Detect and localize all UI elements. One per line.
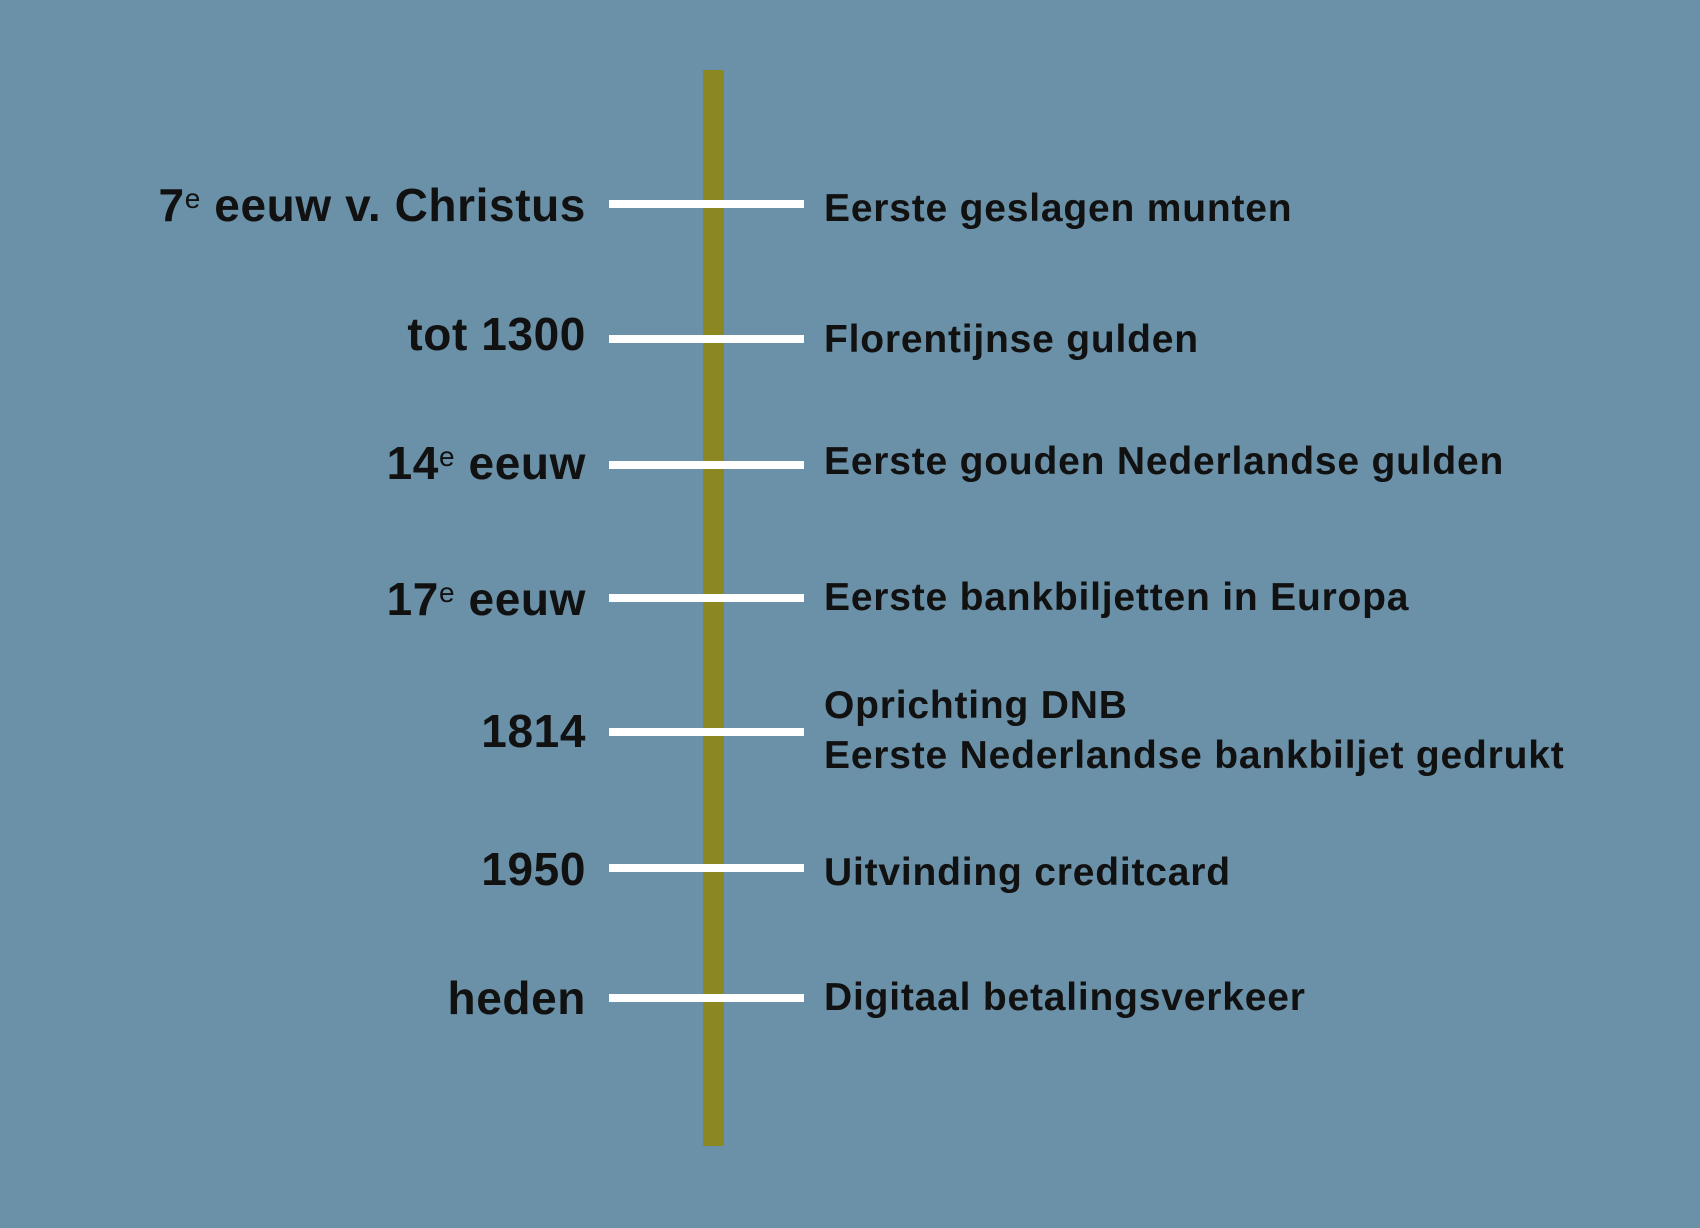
label: heden: heden: [448, 972, 586, 1024]
label: 7e eeuw v. Christus: 7e eeuw v. Christus: [158, 179, 586, 231]
event: Eerste bankbiljetten in Europa: Eerste bankbiljetten in Europa: [824, 576, 1409, 619]
tick: 1814: [609, 728, 804, 736]
event: Oprichting DNB: [824, 684, 1564, 777]
label: 14e eeuw: 14e eeuw: [387, 437, 586, 489]
label: 1950: 1950: [481, 843, 586, 895]
event: Eerste geslagen munten: Eerste geslagen munten: [824, 187, 1292, 230]
event: Eerste gouden Nederlandse gulden: Eerste gouden Nederlandse gulden: [824, 440, 1504, 483]
tick: 17e eeuw: [609, 594, 804, 602]
event: Florentijnse gulden: Florentijnse gulden: [824, 318, 1199, 361]
tick: tot 1300: [609, 335, 804, 343]
event: Digitaal betalingsverkeer: Digitaal betalingsverkeer: [824, 976, 1306, 1019]
event: Uitvinding creditcard: Uitvinding creditcard: [824, 851, 1231, 894]
timeline bar: [703, 70, 724, 1146]
event: Oprichting DNB: Oprichting DNB: [824, 684, 1128, 727]
tick: 1950: [609, 864, 804, 872]
label: tot 1300: tot 1300: [407, 308, 586, 360]
tick: 7e eeuw: [609, 200, 804, 208]
tick: 14e eeuw: [609, 461, 804, 469]
label: 1814: 1814: [481, 705, 586, 757]
tick: heden: [609, 994, 804, 1002]
label: 17e eeuw: 17e eeuw: [387, 573, 586, 625]
event: Oprichting DNB: Eerste Nederlandse bankbiljet gedrukt: [824, 734, 1564, 777]
